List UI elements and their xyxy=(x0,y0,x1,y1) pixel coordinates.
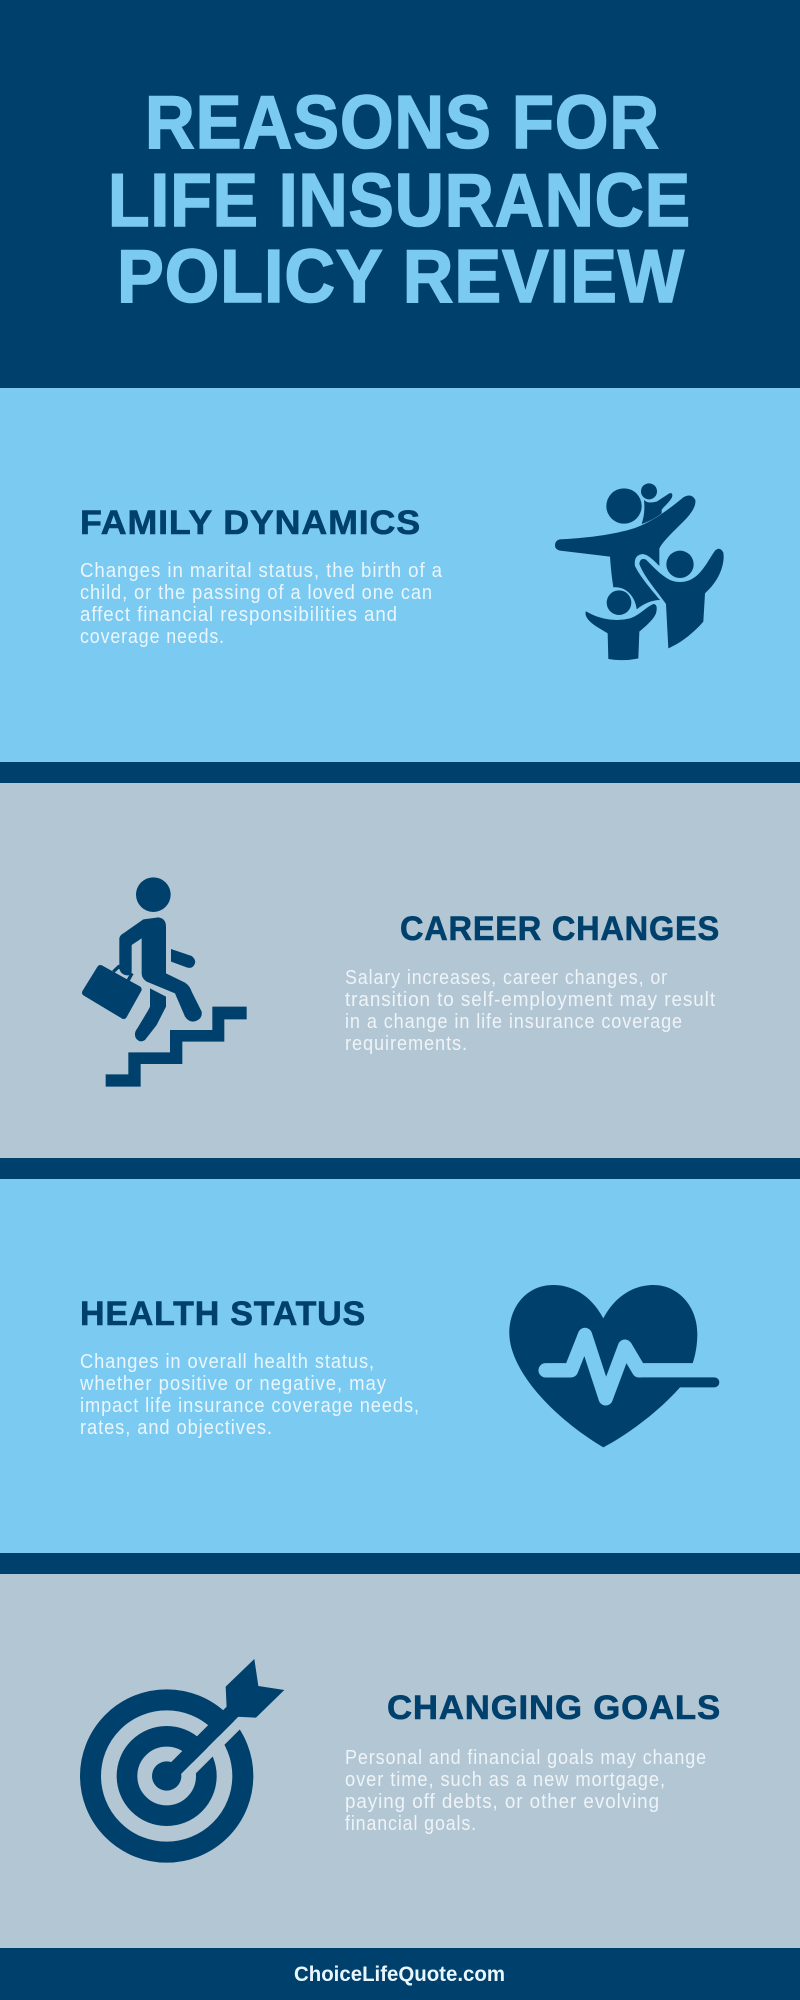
icon: family xyxy=(555,483,724,660)
text block: family dynamics: child, or the passing of a loved one can xyxy=(80,582,433,604)
title xyxy=(108,80,691,318)
heading: health status: HEALTH STATUS xyxy=(80,1295,366,1333)
text block: changing goals: over time, such as a new mortgage, xyxy=(345,1769,666,1791)
text block: health status: impact life insurance coverage needs, xyxy=(80,1395,420,1417)
text block: family dynamics: affect financial responsibilities and xyxy=(80,604,398,626)
panel: family dynamics xyxy=(0,388,800,762)
title: REASONS FOR xyxy=(145,80,660,164)
text block: health status xyxy=(79,1351,420,1439)
text block: family dynamics: coverage needs. xyxy=(80,626,225,648)
title: POLICY REVIEW xyxy=(117,234,685,318)
text block: family dynamics: Changes in marital status, the birth of a xyxy=(80,560,443,582)
text block: career changes: in a change in life insurance coverage xyxy=(345,1011,683,1033)
text block: career changes xyxy=(345,967,716,1055)
text block: health status: whether positive or negative, may xyxy=(79,1373,387,1395)
icon: heart with pulse line xyxy=(509,1285,719,1447)
text block: family dynamics xyxy=(80,560,443,648)
heading: career changes: CAREER CHANGES xyxy=(400,910,720,948)
text block: career changes: Salary increases, career changes, or xyxy=(345,967,668,989)
text block: health status: rates, and objectives. xyxy=(80,1417,273,1439)
footer website text: ChoiceLifeQuote.com xyxy=(294,1962,505,1986)
text block: changing goals: paying off debts, or other evolving xyxy=(345,1791,660,1813)
text block: changing goals xyxy=(345,1747,707,1835)
text block: career changes: transition to self-employment may result xyxy=(345,989,716,1011)
title: LIFE INSURANCE xyxy=(108,158,691,242)
text block: health status: Changes in overall health status, xyxy=(80,1351,375,1373)
text block: changing goals: financial goals. xyxy=(345,1813,477,1835)
icon: target with arrow xyxy=(90,1659,284,1852)
panel: health status xyxy=(0,1179,800,1553)
panel: changing goals xyxy=(0,1574,800,1948)
header panel xyxy=(0,0,800,388)
icon: person climbing stairs with briefcase xyxy=(85,877,247,1087)
panel: career changes xyxy=(0,783,800,1158)
heading: changing goals: CHANGING GOALS xyxy=(387,1689,721,1727)
text block: career changes: requirements. xyxy=(345,1033,468,1055)
heading: family dynamics: FAMILY DYNAMICS xyxy=(80,504,421,542)
text block: changing goals: Personal and financial goals may change xyxy=(345,1747,707,1769)
footer xyxy=(0,1948,800,2000)
